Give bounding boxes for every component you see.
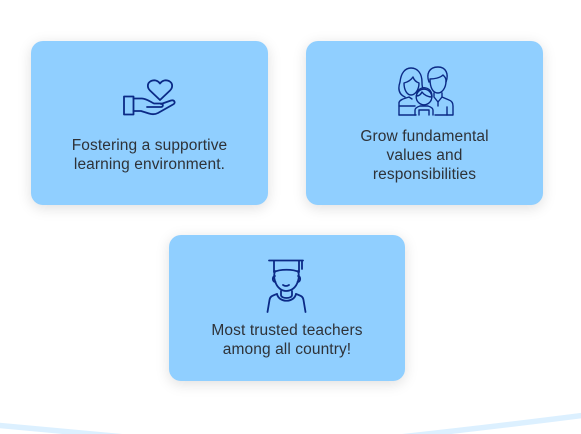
icon: hand holding heart [123, 79, 176, 116]
text: fundamental values [360, 128, 489, 183]
text: fundamental values: values and [386, 147, 462, 164]
panel: fundamental values [306, 41, 543, 205]
icon: family [398, 66, 454, 116]
text: trusted teachers: Most trusted teachers [211, 322, 363, 339]
background curve [0, 413, 581, 434]
text: supportive environment: Fostering a supportive [72, 137, 227, 154]
text: trusted teachers: among all country! [223, 341, 351, 358]
icon: graduate [266, 260, 306, 313]
panel: trusted teachers [169, 235, 405, 381]
text: supportive environment [72, 137, 227, 173]
text: supportive environment: learning environment. [74, 156, 225, 173]
text: fundamental values: responsibilities [373, 166, 476, 183]
text: trusted teachers [211, 322, 363, 358]
panel: supportive environment [31, 41, 268, 205]
text: fundamental values: Grow fundamental [360, 128, 489, 145]
